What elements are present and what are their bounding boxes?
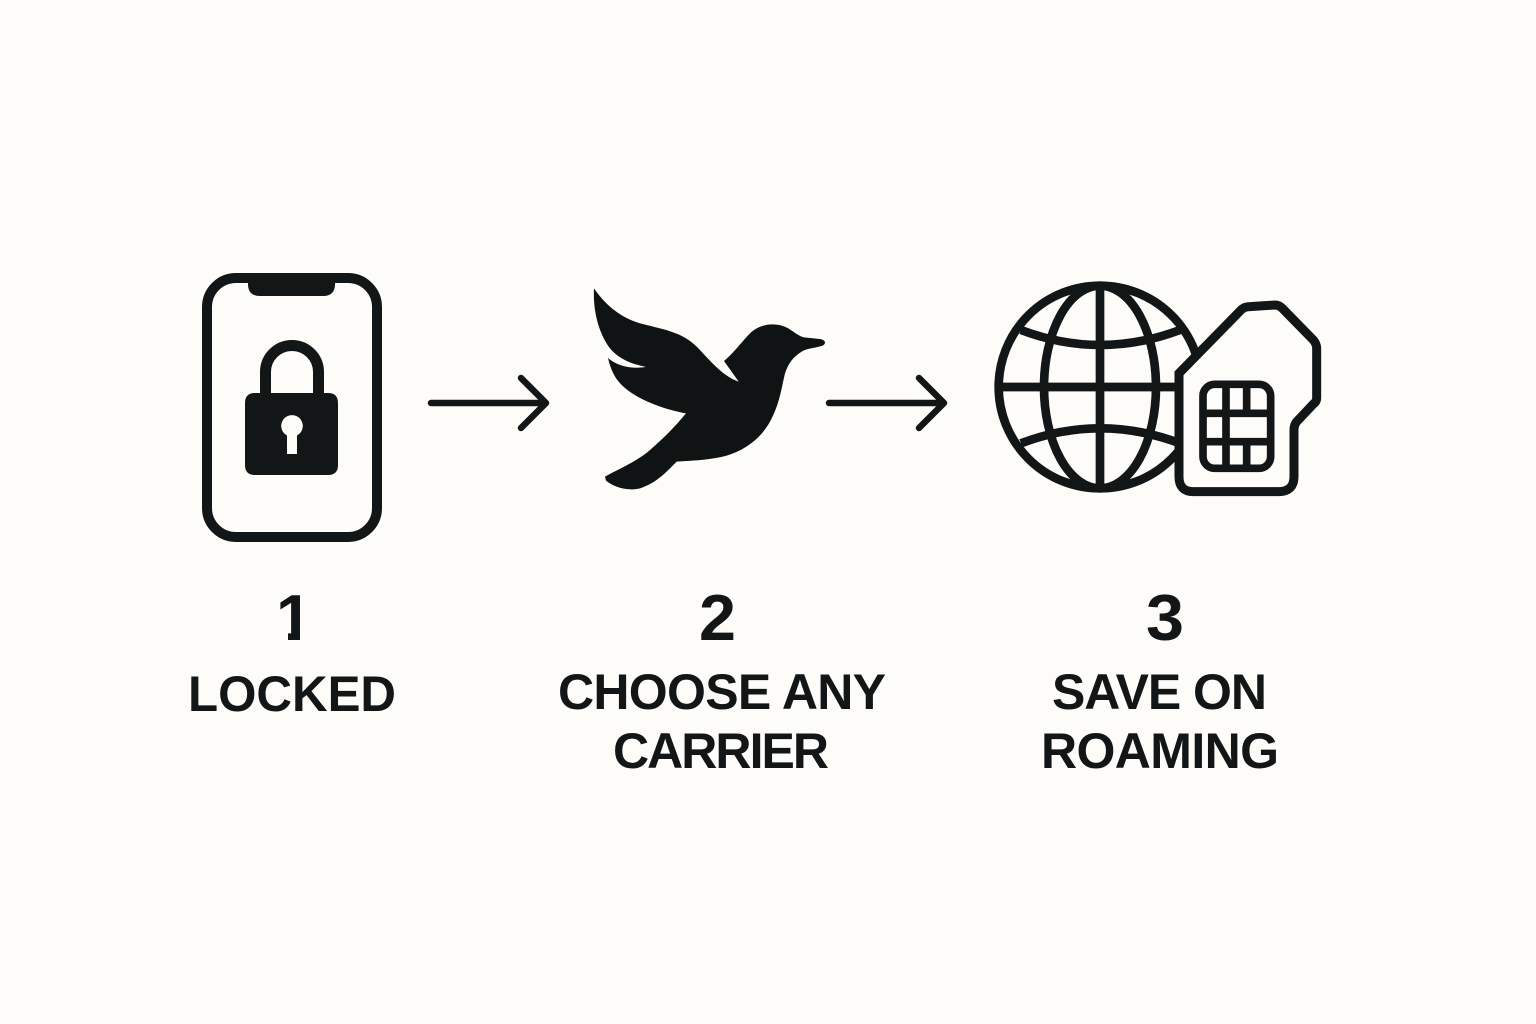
step 2 number: 2 (699, 581, 736, 654)
icon: bird (594, 288, 825, 489)
phone notch (248, 275, 335, 296)
icon: globe and SIM card (999, 286, 1317, 492)
arrow: step 2 to step 3 (829, 378, 944, 428)
SIM chip (1203, 384, 1271, 468)
icon: locked phone (207, 275, 377, 537)
step 2 label: CARRIER (613, 723, 829, 779)
SIM card (1179, 305, 1317, 492)
step 1 label: LOCKED (188, 666, 396, 722)
globe (999, 286, 1201, 488)
step 2 label: CHOOSE ANY (558, 664, 886, 720)
step 3 label: SAVE ON (1052, 664, 1267, 720)
padlock (245, 346, 338, 475)
step 1 number: 1 (276, 581, 312, 654)
arrow: step 1 to step 2 (431, 378, 546, 428)
step 3 label: ROAMING (1041, 723, 1279, 779)
step 3 number: 3 (1146, 581, 1184, 654)
phone body (207, 278, 377, 537)
